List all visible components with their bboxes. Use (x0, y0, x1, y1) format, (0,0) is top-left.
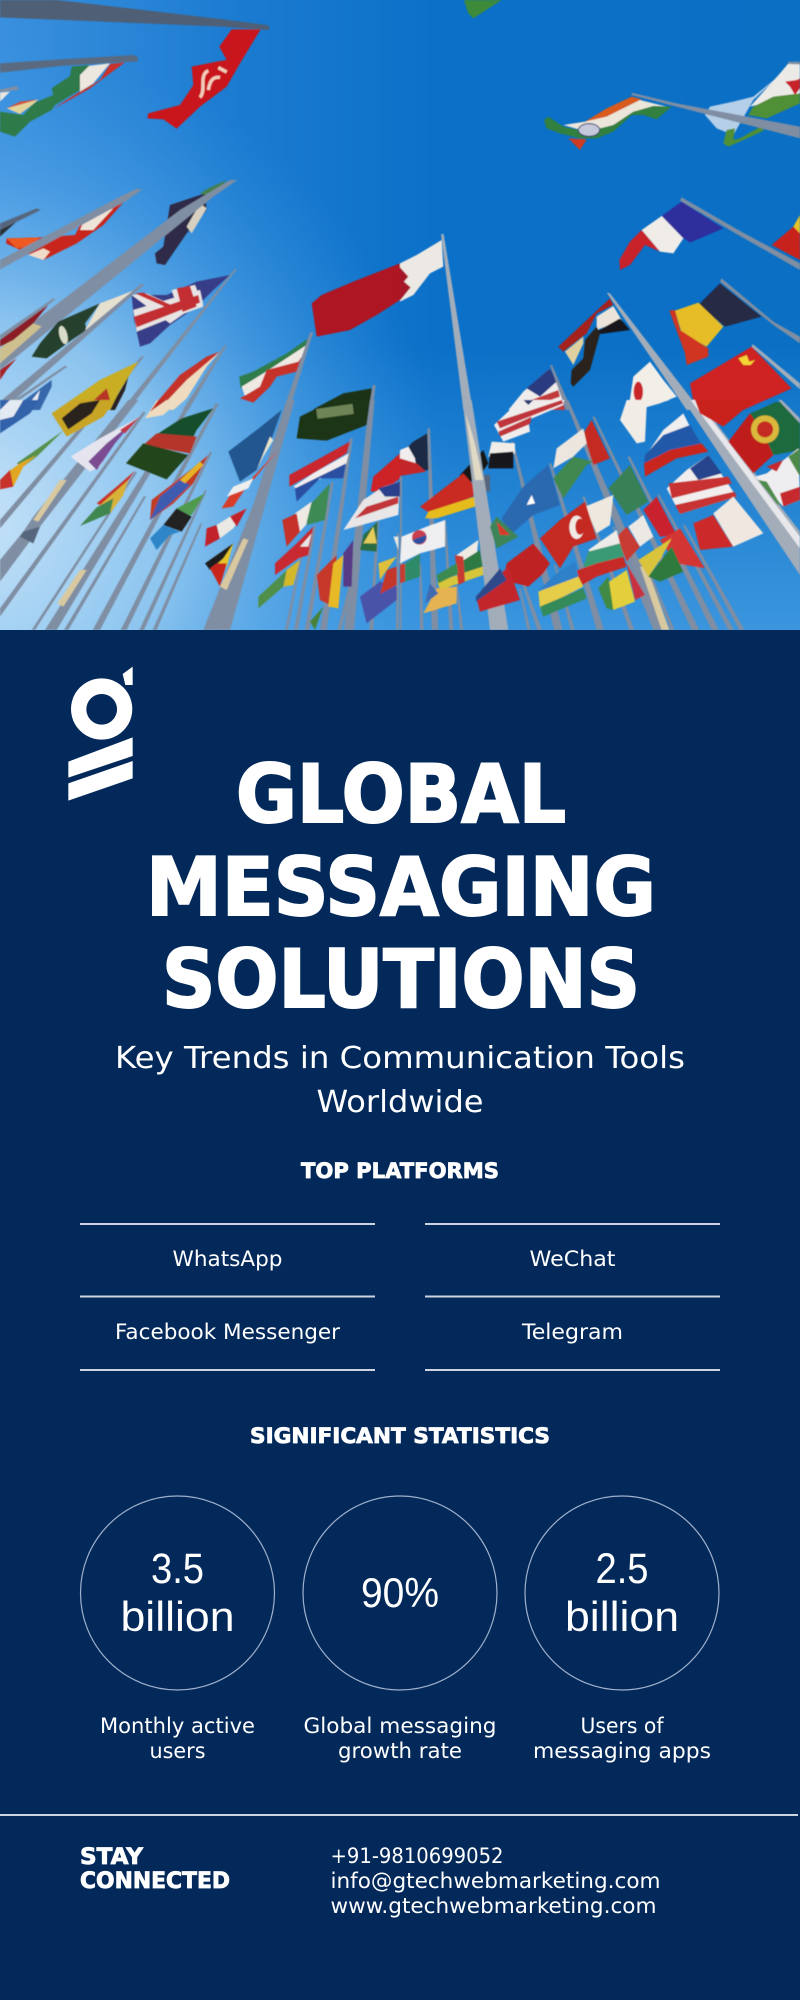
stat: 90% growth rate: growth rate (338, 1739, 462, 1763)
footer contact details: +91-9810699052 (330, 1844, 504, 1868)
footer contact details (330, 1844, 660, 1918)
stat: 2.5 billion users of messaging apps: 2.5 (596, 1545, 648, 1593)
stat: 2.5 billion users of messaging apps: Users of (580, 1714, 664, 1738)
heading: top platforms: TOP PLATFORMS (301, 1159, 499, 1184)
panel: top platforms list: Facebook Messenger (115, 1320, 340, 1345)
panel: top platforms list: WeChat (530, 1247, 616, 1272)
hero photo: flags against a blue sky (0, 0, 800, 630)
subtitle: Worldwide (316, 1085, 484, 1120)
logo mark (68, 667, 133, 801)
title: SOLUTIONS (162, 933, 640, 1026)
stat: 90% growth rate: Global messaging (304, 1714, 496, 1738)
heading: significant statistics: SIGNIFICANT STATISTICS (250, 1424, 550, 1449)
footer heading: stay connected: CONNECTED (80, 1869, 230, 1894)
stat: 3.5 billion monthly active users: 3.5 (151, 1545, 204, 1593)
stat: 2.5 billion users of messaging apps (525, 1496, 719, 1763)
stat: 3.5 billion monthly active users (80, 1496, 274, 1763)
title: GLOBAL (236, 748, 566, 841)
footer contact details: info@gtechwebmarketing.com (330, 1869, 660, 1893)
stat: 3.5 billion monthly active users: Monthly active (100, 1714, 255, 1738)
stat: 2.5 billion users of messaging apps: messaging apps (533, 1739, 711, 1763)
subtitle (115, 1041, 685, 1120)
stat: 90% growth rate: 90% (361, 1569, 439, 1616)
panel: top platforms list: WhatsApp (172, 1247, 282, 1272)
stat: 3.5 billion monthly active users: billion (120, 1593, 234, 1640)
stat: 90% growth rate (303, 1496, 497, 1763)
title (146, 748, 656, 1026)
panel: top platforms list (80, 1223, 720, 1371)
stat: 3.5 billion monthly active users: users (150, 1739, 206, 1763)
subtitle: Key Trends in Communication Tools (115, 1041, 685, 1076)
footer contact details: www.gtechwebmarketing.com (330, 1894, 656, 1918)
footer heading: stay connected: STAY (80, 1845, 144, 1870)
footer heading: stay connected (80, 1845, 230, 1894)
title: MESSAGING (146, 841, 656, 934)
stat: 2.5 billion users of messaging apps: billion (565, 1593, 679, 1640)
panel: top platforms list: Telegram (521, 1320, 623, 1345)
